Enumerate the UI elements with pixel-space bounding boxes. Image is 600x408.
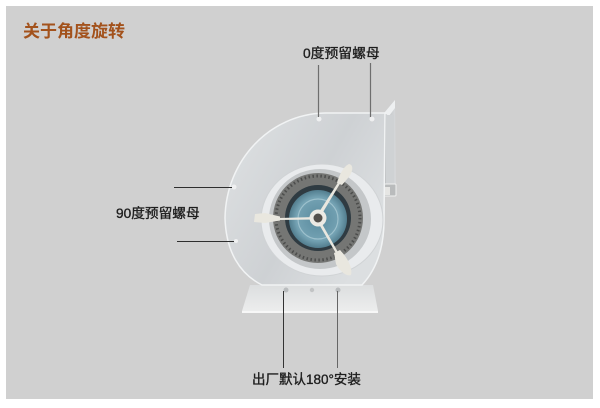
fan illustration bbox=[225, 100, 396, 313]
leader lines: 0 degree nuts bbox=[318, 63, 370, 117]
label: 0 degree nuts: 0度预留螺母 bbox=[303, 46, 380, 61]
title: 关于角度旋转 bbox=[23, 21, 125, 41]
outlet flange bbox=[373, 100, 396, 196]
leader lines: 90 degree nuts bbox=[174, 188, 234, 242]
scroll housing bbox=[225, 113, 385, 285]
label: 90 degree nuts: 90度预留螺母 bbox=[116, 206, 200, 221]
hub bbox=[310, 210, 326, 226]
impeller bbox=[273, 173, 363, 263]
inlet ring bbox=[261, 164, 383, 276]
motor bbox=[289, 190, 347, 248]
leader lines: 180 degree nuts bbox=[284, 291, 338, 368]
nuts bbox=[232, 116, 374, 243]
mounting base plate bbox=[242, 285, 378, 313]
label: 180 degree factory default: 出厂默认180°安装 bbox=[252, 372, 361, 387]
spider arms bbox=[254, 164, 352, 275]
